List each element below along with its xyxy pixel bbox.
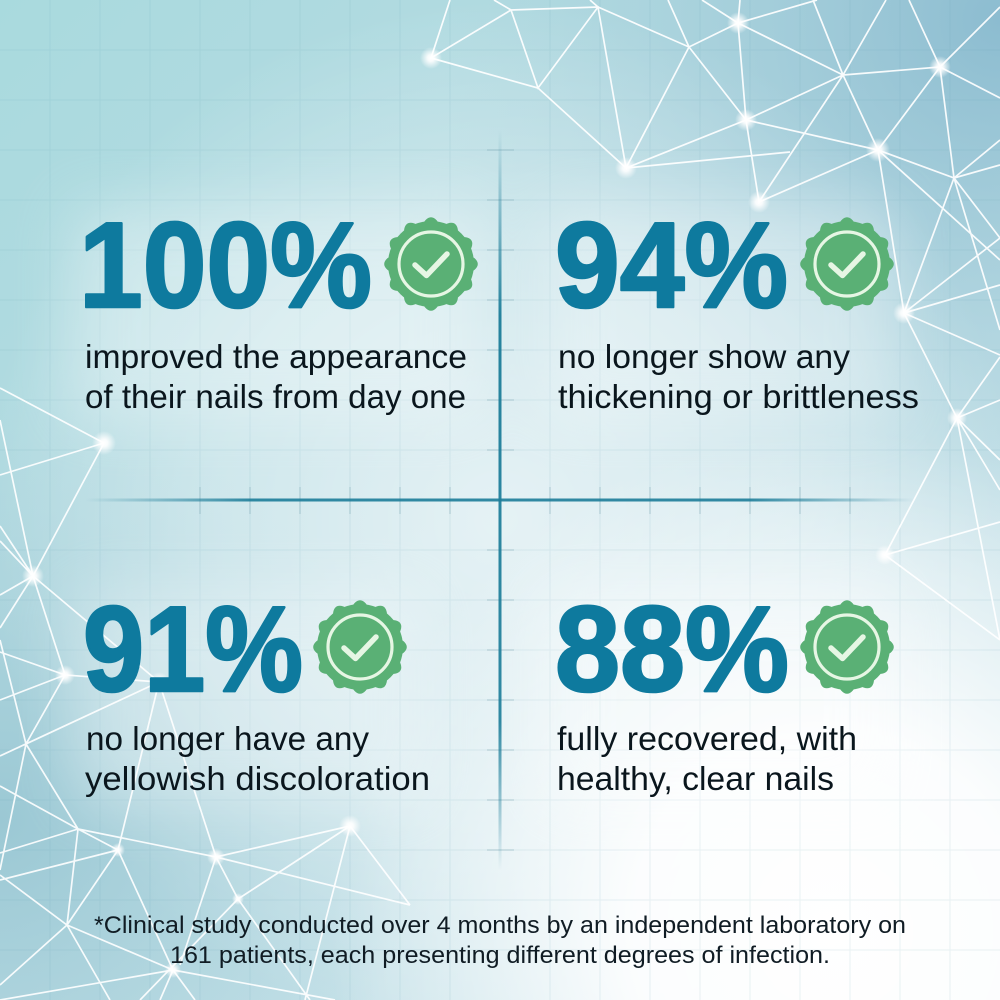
description: no longer show any	[558, 338, 850, 375]
check badge	[313, 600, 407, 694]
quadrant divider axes with ticks	[85, 130, 915, 870]
stat: 91%	[83, 581, 430, 797]
check badge	[800, 217, 894, 311]
description: no longer have any	[86, 720, 369, 757]
description: healthy, clear nails	[557, 760, 834, 797]
glow behind stat blocks	[70, 205, 895, 805]
91% value: 91%	[83, 581, 303, 717]
description: thickening or brittleness	[558, 378, 919, 415]
100% value: 100%	[79, 197, 372, 333]
88% value: 88%	[555, 581, 789, 717]
stat: 100%	[79, 197, 478, 415]
footnote: 161 patients, each presenting different degrees of infection.	[170, 942, 830, 969]
description	[558, 338, 919, 415]
check badge	[384, 217, 478, 311]
stat: 88%	[555, 581, 894, 797]
description: fully recovered, with	[557, 720, 857, 757]
description	[85, 338, 467, 415]
description: improved the appearance	[85, 338, 467, 375]
description: yellowish discoloration	[85, 760, 430, 797]
description	[557, 720, 857, 797]
94% value: 94%	[555, 197, 788, 333]
network: top right	[431, 0, 1000, 640]
stat: 94%	[555, 197, 919, 415]
network: lower left	[0, 388, 410, 1000]
footnote	[94, 912, 906, 969]
description: of their nails from day one	[85, 378, 466, 415]
footnote: *Clinical study conducted over 4 months by an independent laboratory on	[94, 912, 906, 939]
description	[85, 720, 430, 797]
check badge	[800, 600, 894, 694]
